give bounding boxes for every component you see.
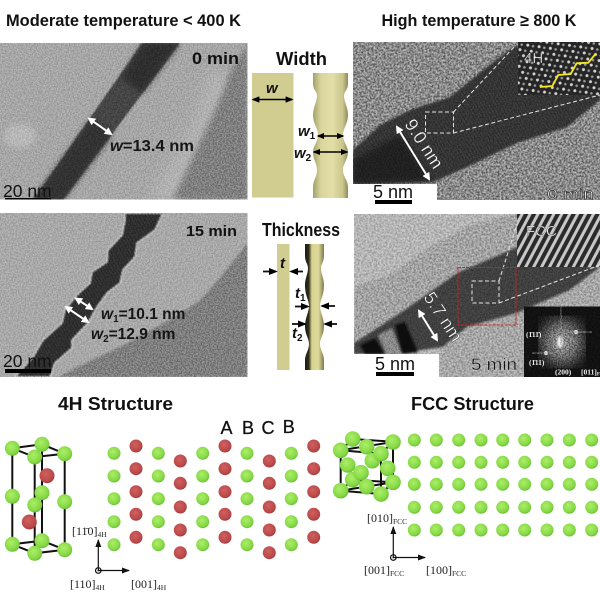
label: (111) upper: (1̄11̄) <box>526 330 542 339</box>
label: (111) lower: (1̄11) <box>529 358 545 367</box>
scale bar: 20 nm: 20 nm <box>3 351 52 371</box>
arrow: w2 <box>314 151 347 153</box>
arrow: t1 left <box>295 306 308 308</box>
label: [1-10]4H: 4H <box>98 530 107 539</box>
label: FCC: FCC <box>526 223 557 240</box>
unit cell: 4H <box>5 437 72 561</box>
label: [001]4H: [001] <box>131 577 157 591</box>
diagram: wavy ribbon thickness <box>292 244 337 370</box>
label: w1: 1 <box>310 131 316 142</box>
label: [011] zone axis: [011] <box>581 368 597 376</box>
label: 9.0 nm: 9.0 nm <box>401 115 447 172</box>
label: [001]4H: 4H <box>157 583 167 592</box>
label: [001]FCC: [001] <box>364 563 390 577</box>
label: w2=12.9 nm: w <box>91 326 104 343</box>
label: w1=10.1 nm: 1 <box>113 314 119 325</box>
label: w1=10.1 nm: =10.1 nm <box>119 306 185 323</box>
diagram: wavy ribbon width <box>294 73 348 198</box>
panel: TEM 15 min at moderate temperature <box>0 213 248 377</box>
heading: width: Width <box>276 48 327 69</box>
diagram: flat ribbon width <box>252 73 294 198</box>
scale bar: 5 nm: 5 nm <box>375 354 415 374</box>
label: [100]FCC: [100] <box>426 563 452 577</box>
arrow: t2 left <box>292 323 305 325</box>
arrow: w1 <box>318 135 343 137</box>
arrow: t1 right <box>322 305 335 307</box>
zigzag: stacking sequence <box>540 53 596 87</box>
stacking labels: A B C B: B <box>283 417 295 437</box>
heading: thickness: Thickness <box>262 219 340 240</box>
inset: FFT diffraction pattern <box>524 306 600 378</box>
label: w: w <box>266 80 279 97</box>
label: 0 min: 0 min <box>192 50 239 68</box>
label: w2=12.9 nm: 2 <box>103 334 109 345</box>
label: w=13.4 nm: w=13.4 nm <box>110 138 194 155</box>
panel: HRTEM 5 min at high temperature <box>354 214 600 378</box>
label: (200): (200) <box>555 368 572 376</box>
label: t1: t <box>295 285 300 302</box>
label: w1=10.1 nm: w <box>101 306 114 323</box>
arrow: t2 right <box>325 323 337 325</box>
arrow: width w <box>89 118 111 134</box>
label: t2: t <box>292 325 297 342</box>
diagram: flat ribbon thickness <box>263 244 303 370</box>
arrow: 5.7 nm <box>419 311 437 340</box>
label: 5.7 nm: 5.7 nm <box>420 288 466 345</box>
atom lattice: 4H <box>108 440 320 559</box>
red selection box <box>458 268 516 325</box>
label: w1: w <box>298 123 311 140</box>
label: [110]4H: 4H <box>96 583 105 592</box>
label: w2=12.9 nm: =12.9 nm <box>109 326 175 343</box>
label: [001]FCC: FCC <box>390 569 404 578</box>
scale bar: 5 nm: 5 nm <box>373 182 413 202</box>
arrow: 9.0 nm <box>397 127 429 179</box>
label: t1: 1 <box>300 293 306 304</box>
label: [100]FCC: FCC <box>452 569 466 578</box>
panel: TEM 0 min at moderate temperature <box>0 43 248 201</box>
label: [010]FCC: FCC <box>393 517 407 526</box>
heading: FCC structure: FCC Structure <box>411 393 534 414</box>
arrow: width w2 <box>66 307 88 322</box>
stacking labels: A B C B: B <box>242 418 254 438</box>
label: [011] zone axis: F <box>597 372 600 378</box>
heading: 4H structure: 4H Structure <box>58 393 173 414</box>
zoom box: dashed selection <box>472 224 600 303</box>
white box behind scale bar <box>354 354 439 377</box>
axes: 4H directions <box>70 524 167 592</box>
label: [1-10]4H: [11̄0] <box>72 524 98 538</box>
unit cell: FCC <box>333 431 401 502</box>
arrow: width w1 <box>76 298 92 309</box>
label: w2: w <box>294 145 307 162</box>
inset: FCC lattice <box>517 214 600 267</box>
heading: high temperature: High temperature ≥ 800 K <box>382 12 577 30</box>
stacking labels: A B C B: A <box>220 418 233 438</box>
atom lattice: FCC <box>408 434 598 536</box>
label: 4H: 4H <box>524 50 543 67</box>
arrow: left t pointer <box>263 270 276 272</box>
panel: HRTEM 0 min at high temperature <box>353 42 600 203</box>
label: w2: 2 <box>306 153 312 164</box>
arrow: right t pointer <box>291 270 303 272</box>
label: [110]4H: [110] <box>70 577 96 591</box>
stacking labels: A B C B: C <box>262 418 274 438</box>
heading: moderate temperature: Moderate temperature < 400 K <box>6 12 241 30</box>
axes: FCC directions <box>364 511 466 578</box>
white box behind scale bar <box>353 184 437 200</box>
arrow: flat width <box>253 98 292 100</box>
label: t2: 2 <box>297 333 303 344</box>
zoom box: dashed selection <box>426 46 600 133</box>
label: 0 min: 0 min <box>547 186 594 203</box>
scale bar: 20 nm: 20 nm <box>3 181 52 201</box>
inset: 4H lattice <box>518 42 600 95</box>
label: t: t <box>280 255 286 272</box>
stacking labels: A B C B <box>220 417 295 438</box>
label: 5 min: 5 min <box>471 355 517 374</box>
label: [010]FCC: [010] <box>367 511 393 525</box>
label: 15 min: 15 min <box>186 223 237 240</box>
